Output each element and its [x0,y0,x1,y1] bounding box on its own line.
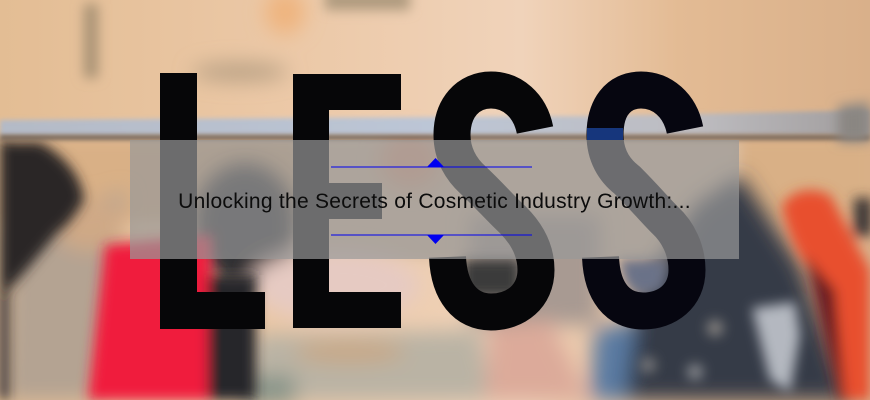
letter L [160,73,265,329]
rail tint on second S [587,128,623,140]
lettering: LESS [160,73,687,329]
letter E [293,74,401,328]
headline: Unlocking the Secrets of Cosmetic Industry Growth:... [178,190,691,213]
letter S (second) [600,90,687,311]
title panel [130,140,739,259]
top divider with up arrow [331,158,532,244]
letter S (first) [448,90,536,312]
